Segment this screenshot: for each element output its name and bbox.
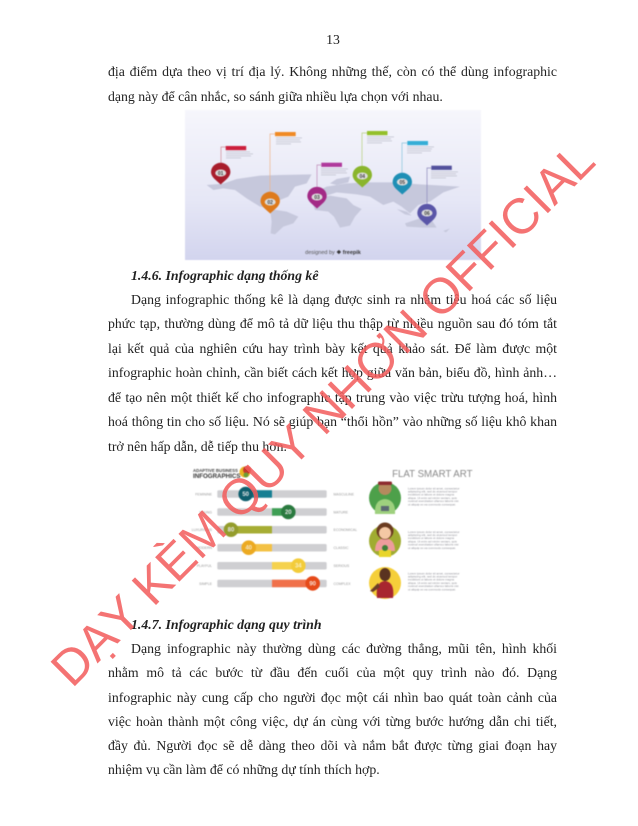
statistics infographic image: Lorem ipsum dolor sit amet, consectetur bbox=[408, 530, 459, 534]
lorem ipsum blocks: adipiscing elit, sed do eiusmod tempor bbox=[408, 490, 457, 494]
statistics infographic image: adipiscing elit, sed do eiusmod tempor bbox=[408, 574, 457, 578]
bar 34 bbox=[272, 558, 306, 573]
right labels: MASCULINE bbox=[334, 492, 355, 496]
statistics paragraph: lại kết quả của nghiên cứu hay trình bày kết quả khảo sát. Để làm được một bbox=[108, 341, 557, 356]
intro paragraph: địa điểm dựa theo vị trí địa lý. Không những thế, còn có thể dùng infographic bbox=[108, 64, 557, 79]
heading 1.4.6: 1.4.6. Infographic dạng thống kê bbox=[131, 268, 318, 283]
title tags bbox=[226, 131, 452, 170]
left labels: PLAYFUL bbox=[197, 564, 212, 568]
pin 02 bbox=[260, 192, 280, 214]
statistics infographic image: Lorem ipsum dolor sit amet, consectetur bbox=[408, 572, 459, 576]
chart title: ADAPTIVE BUSINESS bbox=[193, 468, 238, 473]
statistics paragraph: infographic hoàn chỉnh, cần biết cách kết hợp giữa văn bản, biểu đồ, hình ảnh… bbox=[108, 365, 557, 380]
bar 20: 20 bbox=[285, 510, 292, 516]
left labels: LUXURIOUS bbox=[192, 528, 213, 532]
bar 34: 34 bbox=[295, 564, 302, 570]
pin 04 bbox=[353, 166, 372, 188]
bar 50 bbox=[238, 487, 272, 501]
right labels: COMPLEX bbox=[334, 582, 351, 586]
pin 01: 01 bbox=[218, 171, 224, 177]
page number: 13 bbox=[326, 32, 340, 47]
right labels: CLASSIC bbox=[334, 546, 349, 550]
process paragraph: nhiệm vụ cần làm để có những dự tính thích hợp. bbox=[108, 762, 380, 777]
statistics infographic image: ut aliquip ex ea commodo consequat. bbox=[408, 546, 456, 550]
statistics infographic image: incididunt ut labore et dolore magna bbox=[408, 578, 454, 582]
pin 06: 06 bbox=[424, 211, 430, 217]
world map bbox=[207, 174, 460, 234]
lorem ipsum blocks: aliqua. Ut enim ad minim veniam, quis bbox=[408, 496, 457, 500]
process paragraph: nhằm mô tả các bước từ đầu đến cuối của một quy trình nào đó. Dạng bbox=[108, 665, 557, 680]
chart logo bbox=[240, 466, 251, 478]
bar 20 bbox=[272, 505, 296, 519]
lorem ipsum blocks bbox=[408, 486, 459, 506]
process paragraph: việc hoàn thành một công việc, dự án cùng với từng bước hướng dẫn chi tiết, bbox=[108, 714, 557, 729]
statistics paragraph bbox=[108, 292, 557, 454]
bar 80 bbox=[224, 522, 272, 537]
right labels: MATURE bbox=[334, 510, 349, 514]
freepik credit: designed by ❖ freepik bbox=[305, 249, 362, 256]
bar 40: 40 bbox=[245, 546, 253, 552]
statistics paragraph: trở nên hấp dẫn, dễ tiếp thu hơn. bbox=[108, 439, 287, 454]
right labels: ECONOMICAL bbox=[334, 528, 357, 532]
person 3 bbox=[369, 567, 401, 599]
statistics infographic image: ut aliquip ex ea commodo consequat. bbox=[408, 587, 456, 591]
pin stems bbox=[221, 133, 431, 206]
bar 90: 90 bbox=[309, 581, 317, 587]
person 2 bbox=[369, 522, 401, 557]
intro paragraph: dạng này để cân nhắc, so sánh giữa nhiều lựa chọn với nhau. bbox=[108, 89, 443, 104]
lorem ipsum blocks: Lorem ipsum dolor sit amet, consectetur bbox=[408, 486, 459, 490]
left labels: MODERN bbox=[196, 546, 212, 550]
statistics infographic image: aliqua. Ut enim ad minim veniam, quis bbox=[408, 581, 457, 585]
statistics infographic image: incididunt ut labore et dolore magna bbox=[408, 536, 454, 540]
statistics paragraph: Dạng infographic thống kê là dạng được sinh ra nhằm tiêu hoá các số liệu bbox=[131, 292, 557, 307]
flat smart art title: FLAT SMART ART bbox=[392, 469, 473, 480]
statistics paragraph: hoá thông tin cho số liệu. Nó sẽ giúp bạn “thổi hồn” vào những số liệu khô khan bbox=[108, 414, 557, 429]
statistics infographic image: aliqua. Ut enim ad minim veniam, quis bbox=[408, 540, 457, 544]
chart title bbox=[193, 468, 240, 480]
bar 40 bbox=[241, 540, 272, 555]
pin 05: 05 bbox=[400, 180, 405, 186]
heading 1.4.7: 1.4.7. Infographic dạng quy trình bbox=[131, 617, 322, 632]
pin 06 bbox=[417, 204, 437, 226]
person 1 bbox=[369, 482, 401, 514]
small caption lines bbox=[226, 136, 458, 178]
statistics infographic image: nostrud exercitation ullamco laboris nisi bbox=[408, 584, 459, 588]
pin 03 bbox=[307, 187, 327, 208]
process paragraph: infographic này cung cấp cho người đọc một cái nhìn bao quát toàn cảnh của bbox=[108, 690, 557, 705]
process paragraph: đầy đủ. Người đọc sẽ dễ dàng theo dõi và nắm bắt được từng giai đoạn hay bbox=[108, 738, 557, 753]
right labels bbox=[334, 492, 357, 586]
pin 04: 04 bbox=[360, 174, 365, 180]
bar 50: 50 bbox=[242, 492, 250, 498]
pin 01 bbox=[211, 163, 230, 184]
left labels: FEMININE bbox=[195, 492, 213, 496]
lorem ipsum blocks: nostrud exercitation ullamco laboris nisi bbox=[408, 499, 459, 503]
left labels: YOUNG bbox=[199, 510, 212, 514]
process paragraph: Dạng infographic này thường dùng các đường thẳng, mũi tên, hình khối bbox=[131, 641, 557, 656]
statistics paragraph: phức tạp, thường dùng để mô tả dữ liệu thu thập từ nhiều nguồn sau đó tóm tắt bbox=[108, 316, 557, 331]
watermark: DẠY KÈM QUY NHƠN OFFICIAL bbox=[40, 132, 605, 697]
statistics paragraph: để tạo nên một thiết kế cho infographic tập trung vào việc trừu tượng hoá, hình bbox=[108, 390, 557, 405]
intro paragraph bbox=[108, 64, 557, 104]
statistics infographic image: nostrud exercitation ullamco laboris nisi bbox=[408, 543, 459, 547]
bar 90 bbox=[272, 576, 320, 591]
chart title: INFOGRAPHICS bbox=[193, 473, 240, 480]
pin 05 bbox=[393, 173, 412, 194]
process paragraph bbox=[108, 641, 557, 777]
lorem ipsum blocks: ut aliquip ex ea commodo consequat. bbox=[408, 502, 456, 506]
left labels: SIMPLE bbox=[199, 582, 213, 586]
bar 80: 80 bbox=[228, 528, 235, 534]
pin 02: 02 bbox=[267, 200, 273, 206]
lorem ipsum blocks: incididunt ut labore et dolore magna bbox=[408, 493, 454, 497]
right labels: SERIOUS bbox=[334, 564, 350, 568]
bar tracks bbox=[217, 490, 327, 587]
left labels bbox=[192, 492, 213, 586]
statistics infographic image: adipiscing elit, sed do eiusmod tempor bbox=[408, 533, 457, 537]
pin 03: 03 bbox=[314, 195, 320, 201]
